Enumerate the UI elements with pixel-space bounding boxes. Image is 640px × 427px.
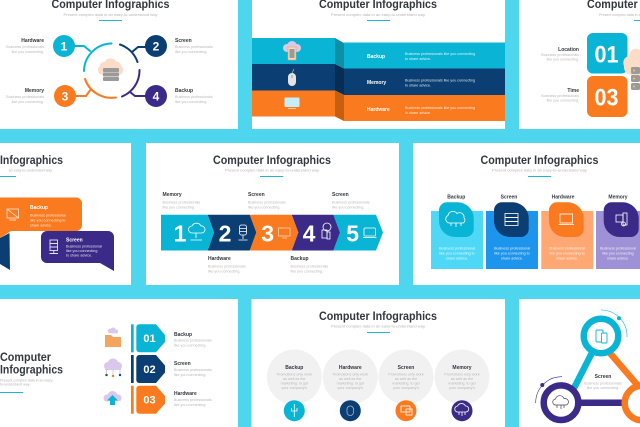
- connectors: [573, 352, 640, 403]
- panel: numbered squares: [519, 0, 640, 129]
- bubble: screen: to share advice.: [66, 254, 92, 258]
- card: screen: share advice.: [501, 256, 523, 260]
- text: backup: like you connecting.: [175, 100, 207, 104]
- card: backup: like you connecting to: [439, 252, 475, 256]
- text: time: [541, 88, 579, 102]
- icon: mouse: [288, 69, 296, 86]
- icon: monitor: [284, 98, 300, 109]
- band: memory: Memory: [367, 80, 386, 86]
- decorative arc: [536, 377, 562, 403]
- circle: memory: marketing, to get: [448, 382, 476, 386]
- text: screen: Screen: [175, 38, 192, 44]
- title: Computer: [0, 352, 51, 364]
- text: location: Business professionals: [541, 53, 579, 57]
- subtitle: to-understand way: [0, 382, 30, 386]
- title: [0, 352, 63, 376]
- text: screen: [174, 361, 212, 377]
- band: hardware: Business professionals like you connecting: [405, 106, 475, 110]
- band: hardware: [252, 90, 505, 121]
- text: backup: Backup: [290, 256, 309, 262]
- tag 02: 02: [143, 364, 156, 376]
- circle: backup: Backup: [285, 365, 303, 371]
- text: screen: Business professionals: [584, 382, 622, 386]
- text: screen: like you connecting.: [332, 206, 364, 210]
- subtitle: Present complex data in an easy-to-understand way: [64, 13, 158, 17]
- bubble: backup: like you connecting to: [30, 218, 65, 222]
- card: screen: Screen: [501, 194, 517, 200]
- text: backup: Business professionals: [174, 338, 212, 342]
- circle: backup: marketing, to get: [281, 382, 308, 386]
- band: memory: [252, 64, 505, 95]
- text: memory: Memory: [162, 192, 182, 198]
- circle: screen: your company's: [393, 386, 419, 390]
- text: screen: Business professionals: [174, 368, 212, 372]
- text: hardware: Business professionals: [208, 264, 246, 268]
- square 03: [587, 76, 628, 117]
- text: backup: Business professionals: [175, 95, 213, 99]
- arrow 4: 4: [303, 221, 316, 247]
- icon: cloud: [553, 396, 568, 409]
- text: screen: [584, 374, 622, 390]
- text: screen: like you connecting.: [174, 373, 206, 377]
- panel: triangle network: [519, 299, 640, 427]
- circle: screen: [378, 350, 434, 421]
- circle: hardware: Promotions only work: [333, 372, 368, 376]
- text: screen: [332, 192, 370, 210]
- icon: laptop outline: [7, 209, 18, 220]
- text: time: like you connecting.: [547, 98, 579, 102]
- card: backup: Business professional: [439, 246, 475, 250]
- icon: folder with cloud: [105, 328, 121, 347]
- card: memory: like you connecting: [602, 252, 634, 256]
- text: screen: Screen: [248, 192, 265, 198]
- bubble: screen: Business professional: [66, 244, 102, 248]
- arrow 4: [292, 215, 340, 250]
- band: hardware: to share advice.: [405, 111, 431, 115]
- card: hardware: Hardware: [552, 194, 575, 200]
- circle: backup: your company's: [281, 386, 307, 390]
- bubble: backup: [0, 198, 82, 238]
- step 1 badge: 1: [61, 40, 68, 54]
- bubble: backup: Business professional: [30, 214, 66, 218]
- text: memory: Memory: [25, 88, 44, 94]
- bubble: backup: share advice.: [30, 224, 52, 228]
- panel: folded bands: [252, 0, 505, 129]
- step 4 badge: 4: [153, 90, 160, 104]
- text: location: Location: [558, 47, 579, 53]
- square 01: 01: [594, 42, 618, 68]
- text: hardware: Hardware: [174, 391, 197, 397]
- text: hardware: Hardware: [208, 256, 231, 262]
- step 3 badge: [54, 85, 76, 107]
- circle: screen: marketing, to get: [392, 382, 420, 386]
- decorative arc: [601, 310, 627, 337]
- text: screen: Business professionals: [175, 45, 213, 49]
- text: screen: Business professionals: [332, 200, 370, 204]
- text: hardware: like you connecting.: [208, 270, 240, 274]
- arrow 2: [208, 215, 256, 250]
- arrow 1: [161, 215, 214, 250]
- bubble: screen: Screen: [66, 238, 83, 244]
- icon: cloud server: [98, 58, 123, 81]
- text: backup: Business professionals: [290, 264, 328, 268]
- text: memory: like you connecting.: [162, 206, 195, 210]
- band: memory: to share advice.: [405, 84, 431, 88]
- tag 03: [131, 386, 165, 414]
- band: hardware: Hardware: [367, 107, 390, 113]
- panel: speech bubbles: [0, 143, 131, 285]
- card: memory: Business professional: [600, 246, 636, 250]
- panel: cards: [413, 143, 640, 285]
- title: Infographics: [0, 155, 63, 167]
- panel: circular ring infographic: [0, 0, 238, 129]
- text: screen: Screen: [174, 361, 191, 367]
- arrow 2: 2: [219, 221, 231, 247]
- icon: cloud network: [104, 358, 122, 377]
- circle: screen: Promotions only work: [388, 372, 424, 376]
- card: backup: share advice.: [446, 256, 468, 260]
- bubble: screen: [41, 231, 114, 271]
- band: backup: Backup: [367, 54, 385, 60]
- band: backup: Business professionals like you connecting: [405, 52, 475, 56]
- band: backup: [252, 38, 505, 68]
- step 3 badge: 3: [62, 90, 69, 104]
- card: hardware: [541, 194, 593, 269]
- panel: tag list: [0, 299, 238, 427]
- arrow 1: 1: [174, 221, 187, 247]
- subtitle: Present complex data in an easy-to-understand way: [331, 13, 425, 17]
- icon: cloud upload: [104, 391, 122, 405]
- circle: hardware: as well as the: [339, 377, 361, 381]
- text: screen: Screen: [595, 374, 611, 380]
- arrow 3: 3: [261, 221, 274, 247]
- card: hardware: share advice.: [556, 256, 578, 260]
- node: devices: [584, 310, 627, 353]
- title: Computer Infographics: [480, 155, 598, 167]
- tag 01: 01: [143, 333, 156, 345]
- tag 01: [131, 324, 165, 352]
- square 01: [587, 33, 628, 74]
- text: backup: [174, 332, 212, 348]
- subtitle: Present complex data in an easy-to-understand way: [492, 168, 587, 172]
- text: location: [541, 47, 579, 62]
- card: screen: [486, 194, 538, 269]
- card: screen: Business professional: [494, 246, 530, 250]
- node: cloud: [536, 377, 578, 420]
- icon: phone and tablet: [596, 330, 607, 343]
- title: Computer Infographics: [213, 155, 331, 167]
- arrow 3: [250, 215, 298, 250]
- card: hardware: Business professional: [549, 246, 585, 250]
- text: hardware: [174, 391, 212, 407]
- text: screen: Business professionals: [248, 200, 286, 204]
- icon: cloud server: [623, 49, 640, 90]
- band: memory: Business professionals like you connecting: [405, 78, 475, 82]
- step 2 badge: [145, 35, 167, 57]
- text: time: Business professionals: [541, 94, 579, 98]
- text: memory: [162, 192, 200, 210]
- circle: memory: Memory: [452, 365, 472, 371]
- text: screen: [175, 38, 213, 54]
- circle: hardware: [323, 350, 378, 421]
- text: backup: Backup: [175, 88, 193, 94]
- text: backup: Backup: [174, 332, 192, 338]
- subtitle: Present complex data in an easy-: [0, 378, 54, 382]
- icon: server: [50, 240, 58, 254]
- text: location: like you connecting.: [547, 58, 579, 62]
- text: backup: like you connecting.: [290, 270, 323, 274]
- card: memory: [596, 194, 640, 269]
- card: backup: Backup: [447, 194, 465, 200]
- text: hardware: Business professionals: [174, 398, 212, 402]
- text: hardware: [208, 256, 246, 274]
- circle: backup: Promotions only work: [277, 372, 312, 376]
- bubble: backup: Backup: [30, 205, 48, 211]
- text: time: Time: [567, 88, 579, 94]
- circle: memory: [434, 350, 490, 421]
- circle: memory: Promotions only work: [444, 372, 480, 376]
- text: backup: [290, 256, 328, 274]
- step 2 badge: 2: [153, 40, 160, 54]
- tag 03: 03: [143, 394, 156, 406]
- circle: hardware: Hardware: [339, 365, 362, 371]
- circle: backup: as well as the: [283, 377, 305, 381]
- text: hardware: Hardware: [21, 38, 44, 44]
- text: screen: like you connecting.: [175, 50, 207, 54]
- text: screen: Screen: [332, 192, 349, 198]
- circle: backup: [267, 350, 322, 421]
- bubble tail: navy: [0, 233, 10, 270]
- arrow 5: [333, 215, 383, 250]
- text: memory: Business professionals: [6, 95, 44, 99]
- panel: numbered arrows: [146, 143, 399, 285]
- card: memory: Memory: [608, 194, 628, 200]
- text: hardware: [6, 38, 44, 54]
- card: screen: like you connecting to: [494, 252, 530, 256]
- text: memory: [6, 88, 44, 104]
- card: memory: share advice.: [607, 256, 629, 260]
- text: memory: Business professionals: [162, 200, 200, 204]
- card: backup: [431, 194, 483, 269]
- text: screen: like you connecting.: [248, 206, 280, 210]
- circle: screen: as well as the: [395, 377, 417, 381]
- subtitle: an easy-to-understand way: [9, 168, 52, 172]
- tag 02: [131, 355, 165, 383]
- text: backup: [175, 88, 213, 104]
- arrow 5: 5: [346, 221, 359, 247]
- text: memory: like you connecting.: [12, 100, 44, 104]
- ring segments: [75, 44, 146, 98]
- icon: clipboard cloud: [283, 41, 301, 60]
- text: hardware: Business professionals: [6, 45, 44, 49]
- text: screen: [248, 192, 286, 210]
- circle: screen: Screen: [398, 365, 414, 371]
- step 4 badge: [145, 85, 167, 107]
- circle: hardware: marketing, to get: [337, 382, 364, 386]
- title: Computer Infographics: [319, 311, 437, 323]
- text: screen: like you connecting.: [587, 386, 619, 390]
- card: hardware: like you connecting to: [549, 252, 585, 256]
- subtitle: Present complex data in an easy-to-understand way: [331, 324, 425, 328]
- node: orange: [625, 386, 640, 420]
- step 1 badge: [53, 35, 75, 57]
- bubble: screen: like you connecting: [66, 249, 97, 253]
- circle: memory: your company's: [449, 386, 475, 390]
- title: Infographics: [0, 364, 63, 376]
- subtitle: Present complex data in an easy-to-understand way: [225, 168, 319, 172]
- subtitle: [0, 378, 54, 386]
- band: backup: to share advice.: [405, 57, 431, 61]
- circle: memory: as well as the: [451, 377, 473, 381]
- circle: hardware: your company's: [337, 386, 363, 390]
- panel: circles: [252, 299, 505, 427]
- text: hardware: like you connecting.: [12, 50, 44, 54]
- text: backup: like you connecting.: [174, 344, 206, 348]
- square 03: 03: [594, 84, 618, 112]
- text: hardware: like you connecting.: [174, 403, 206, 407]
